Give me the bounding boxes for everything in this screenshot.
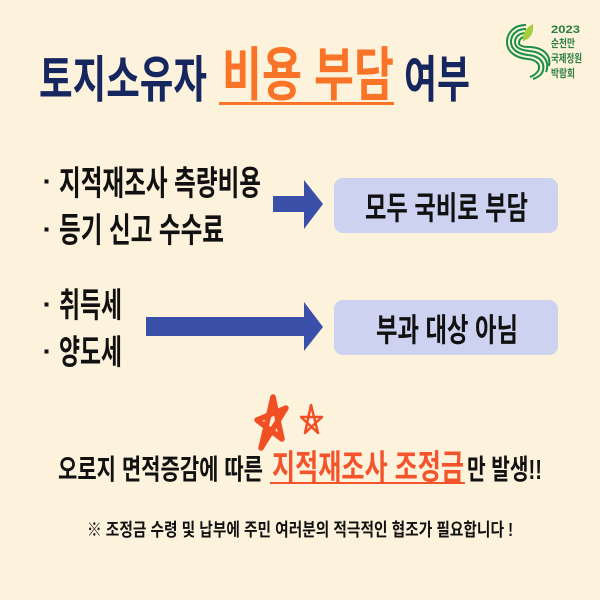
logo: 2023 Suncheonman International Garden Expo: 박람회 — [551, 66, 575, 80]
icon: small hand-drawn star — [301, 405, 322, 433]
logo: 2023 Suncheonman International Garden Expo: 순천만 — [551, 36, 575, 50]
list: survey and registration costs — [44, 165, 261, 250]
statement: only adjustment money arises: 만 발생!! — [467, 454, 542, 485]
box: fully state funded: 모두 국비로 부담 — [365, 190, 528, 226]
arrow: costs to national funding — [273, 180, 323, 229]
logo: 2023 Suncheonman International Garden Expo: 국제정원 — [551, 51, 582, 65]
statement: only adjustment money arises: 지적재조사 조정금 — [272, 449, 464, 487]
logo: 2023 Suncheonman International Garden Expo — [507, 24, 582, 80]
list: taxes: 양도세 — [59, 334, 122, 372]
box: fully state funded — [334, 178, 558, 233]
logo: 2023 Suncheonman International Garden Expo: 2023 — [551, 24, 580, 36]
box: not subject: 부과 대상 아님 — [376, 312, 518, 348]
arrow: taxes to not applicable — [146, 302, 323, 351]
title: 토지소유자 — [39, 52, 207, 108]
list: taxes: 취득세 — [59, 287, 122, 325]
statement: only adjustment money arises — [58, 449, 542, 487]
icon: large hand-drawn star — [257, 397, 286, 448]
statement: only adjustment money arises: 오로지 면적증감에 따른 — [58, 454, 263, 485]
list: survey and registration costs: 지적재조사 측량비용 — [59, 165, 261, 203]
title: 비용 부담 — [222, 43, 394, 108]
footnote: request for cooperation: ※ 조정금 수령 및 납부에 주민 여러분의 적극적인 협조가 필요합니다 ! — [87, 520, 513, 540]
list: survey and registration costs: 등기 신고 수수료 — [59, 212, 224, 250]
title — [39, 43, 470, 108]
title: 여부 — [404, 52, 470, 108]
box: not subject — [334, 300, 558, 355]
list: taxes — [44, 287, 122, 372]
